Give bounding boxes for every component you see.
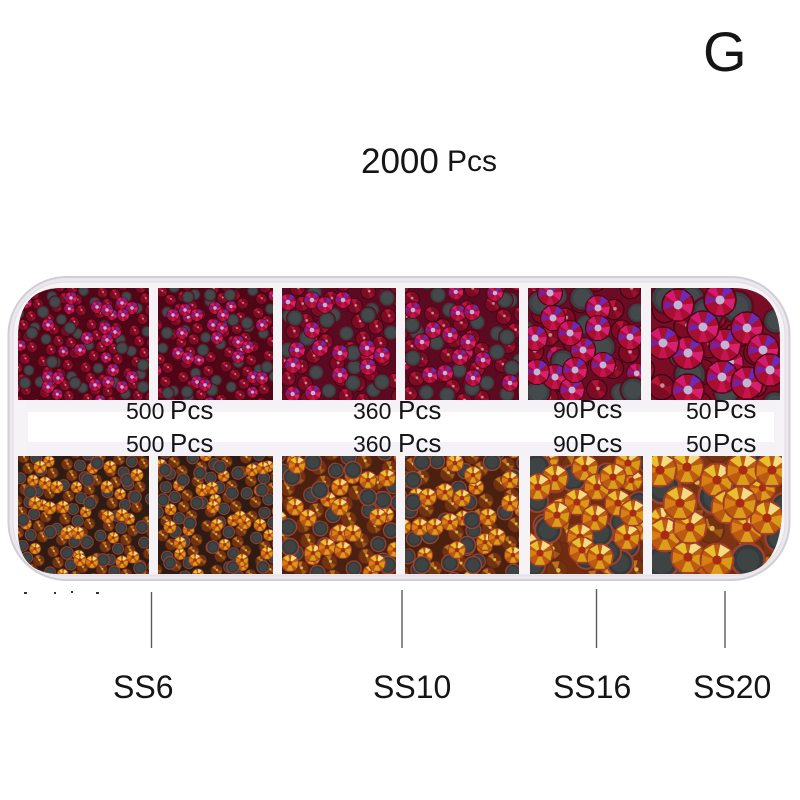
compartment: bottom row SS6 right: [157, 456, 273, 574]
quantity labels: top row: 90: [553, 397, 579, 423]
quantity labels: bottom row: Pcs: [170, 428, 213, 458]
quantity labels: top row: 360: [353, 398, 391, 424]
quantity labels: bottom row: 360: [353, 431, 391, 457]
panel: rhinestone tray: [8, 277, 790, 580]
quantity labels: bottom row: 50: [686, 431, 712, 457]
size label: SS20: SS20: [693, 669, 771, 705]
size label: SS16: SS16: [553, 669, 631, 705]
compartment: bottom row SS20: [652, 456, 782, 574]
quantity labels: bottom row: 500: [126, 431, 164, 457]
size label: SS10: SS10: [373, 669, 451, 705]
heading: 2000 Pcs: 2000: [361, 142, 439, 181]
quantity labels: top row: 500: [126, 398, 164, 424]
stray marks below tray: [24, 591, 99, 594]
size pointer lines: [152, 589, 725, 648]
quantity labels: top row: Pcs: [713, 394, 756, 424]
heading: 2000 Pcs: Pcs: [447, 145, 497, 178]
compartment: top row SS6 left: [18, 288, 149, 400]
size label: SS6: SS6: [113, 669, 173, 705]
compartment: top row SS6 right: [158, 288, 273, 400]
quantity labels: top row: [126, 394, 756, 425]
compartment: bottom row SS6 left: [17, 456, 149, 574]
compartment: bottom row SS10 left: [280, 454, 396, 574]
quantity labels: bottom row: [126, 428, 756, 458]
title: letter G: G: [703, 20, 747, 83]
compartment: top row SS16: [528, 288, 641, 400]
compartment: top row SS20: [651, 288, 780, 400]
quantity labels: top row: Pcs: [579, 394, 622, 424]
compartment: bottom row SS16: [530, 456, 643, 574]
compartment: top row SS10 left: [280, 288, 396, 401]
quantity labels: top row: Pcs: [170, 395, 213, 425]
quantity labels: bottom row: Pcs: [398, 428, 441, 458]
quantity labels: top row: 50: [686, 398, 712, 424]
compartment: bottom row SS10 right: [404, 454, 522, 574]
quantity labels: bottom row: Pcs: [713, 428, 756, 458]
quantity labels: bottom row: Pcs: [579, 428, 622, 458]
quantity labels: bottom row: 90: [553, 431, 579, 457]
quantity labels: top row: Pcs: [398, 395, 441, 425]
compartment: top row SS10 right: [404, 285, 520, 403]
